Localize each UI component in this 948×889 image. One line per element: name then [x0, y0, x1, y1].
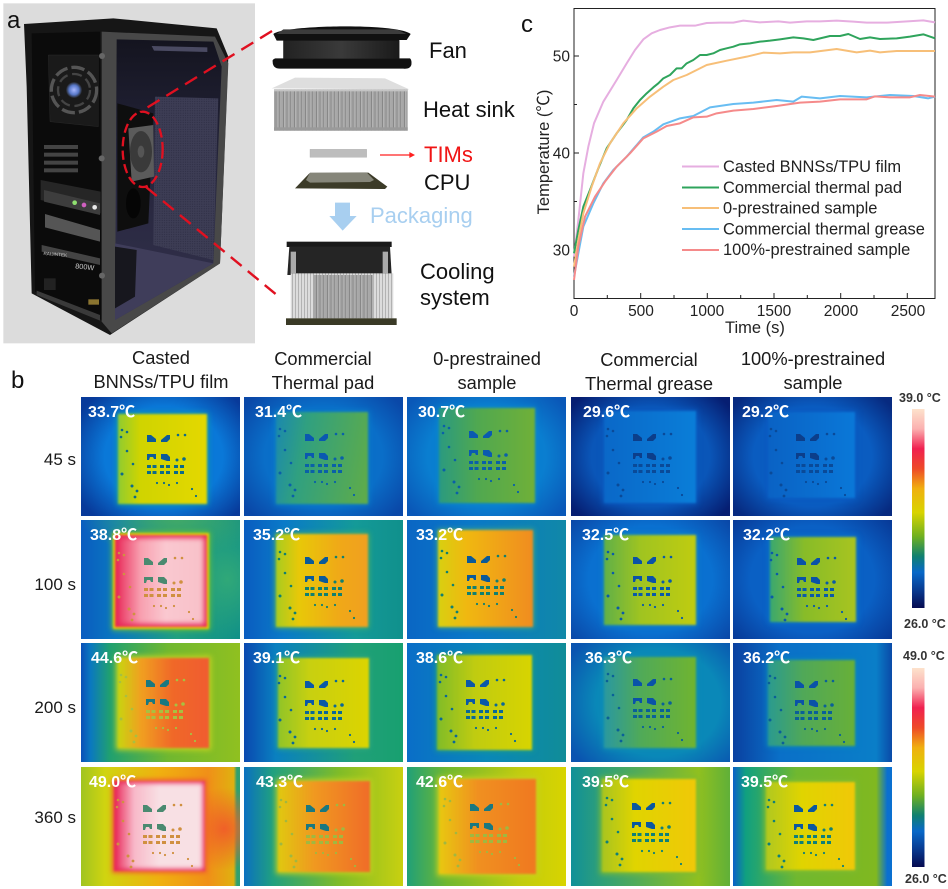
- thermal image: thermal pad 100 s: 35.2℃: [253, 527, 300, 544]
- heading: thermal pad: Thermal pad: [272, 372, 374, 393]
- axis tick labels: 50: [553, 48, 570, 66]
- label: Cooling system: Cooling: [420, 259, 495, 284]
- heading: thermal grease: Thermal grease: [585, 373, 713, 394]
- thermal image: casted film 45 s: [81, 397, 240, 516]
- grey background: [3, 3, 255, 343]
- heading: 100%-prestrained: 100%-prestrained: [741, 348, 885, 369]
- thermal image: casted film 360 s: 49.0℃: [89, 774, 136, 791]
- legend: Commercial thermal pad: [723, 179, 902, 197]
- label: TIMs: TIMs: [424, 142, 473, 167]
- colour scale 26–49 °C: 26.0 °C: [905, 872, 947, 886]
- dashed callout ring: [123, 112, 163, 187]
- panel label a: a: [7, 7, 20, 34]
- axis tick labels: 30: [553, 242, 570, 260]
- x axis title: Time (s): [725, 319, 785, 337]
- thermal image: thermal grease 360 s: 39.5℃: [582, 774, 629, 791]
- row label: 100 s: 100 s: [34, 575, 76, 594]
- colour scale 26–49 °C: 49.0 °C: [903, 649, 945, 663]
- heading: 0-prestrained: 0-prestrained: [433, 348, 541, 369]
- thermal image: 100%-prestrained 100 s: 32.2℃: [743, 527, 790, 544]
- panel label b: b: [11, 367, 24, 394]
- thermal image: thermal pad 360 s: [244, 767, 403, 886]
- heading: 100%-prestrained: sample: [784, 372, 842, 393]
- thermal image: casted film 45 s: 33.7℃: [88, 404, 135, 421]
- data curves: [574, 20, 935, 280]
- colour scale 26–49 °C: [903, 649, 947, 886]
- thermal image: casted film 200 s: [81, 643, 240, 762]
- heading: casted film: BNNSs/TPU film: [93, 371, 229, 392]
- thermal image: casted film 100 s: [81, 520, 240, 639]
- axis tick labels: 1500: [757, 303, 792, 320]
- thermal image: 0-prestrained 200 s: 38.6℃: [416, 650, 463, 667]
- label: Fan: Fan: [429, 38, 467, 63]
- thermal image: thermal pad 100 s: [244, 520, 403, 639]
- thermal image: thermal grease 45 s: 29.6℃: [583, 404, 630, 421]
- icon: CPU: [295, 172, 387, 189]
- axis tick labels: 2000: [824, 303, 859, 320]
- thermal image: casted film 200 s: 44.6℃: [91, 650, 138, 667]
- row label: 45 s: 45 s: [44, 450, 76, 469]
- cooling system exploded view: [272, 26, 415, 325]
- thermal image: thermal grease 200 s: [571, 643, 730, 762]
- dashed red zoom lines: [139, 30, 276, 295]
- component labels: [370, 38, 516, 310]
- thermal image: 100%-prestrained 200 s: [733, 643, 892, 762]
- arrow: packaging: [329, 203, 357, 231]
- legend: [682, 158, 925, 259]
- heading: thermal pad: Commercial: [274, 348, 372, 369]
- thermal image: 100%-prestrained 100 s: [733, 520, 892, 639]
- thermal image: casted film 100 s: 38.8℃: [90, 527, 137, 544]
- thermal image: 0-prestrained 45 s: 30.7℃: [418, 404, 465, 421]
- thermal image: 0-prestrained 360 s: [407, 767, 566, 886]
- icon: assembled cooling system: [286, 242, 397, 325]
- thermal image: 100%-prestrained 45 s: [733, 397, 892, 516]
- thermal image: 100%-prestrained 360 s: [733, 767, 892, 886]
- heading: thermal grease: Commercial: [600, 349, 698, 370]
- panel c: temperature vs time chart: [521, 8, 936, 337]
- y axis title: Temperature (℃): [535, 90, 553, 214]
- legend: Commercial thermal grease: [723, 220, 925, 238]
- label: Heat sink: Heat sink: [423, 97, 516, 122]
- thermal image: 0-prestrained 45 s: [407, 397, 566, 516]
- axis tick labels: 2500: [891, 303, 926, 320]
- legend: 100%-prestrained sample: [723, 241, 910, 259]
- axis tick labels: 0: [570, 303, 579, 320]
- arrow to TIMs: [380, 152, 415, 158]
- icon: fan: [273, 26, 412, 69]
- computer case: 800W: [75, 261, 95, 272]
- label: Cooling system: system: [420, 285, 490, 310]
- thermal image: 0-prestrained 360 s: 42.6℃: [416, 774, 463, 791]
- computer case: RAIJINTEK: [43, 251, 68, 258]
- axis tick labels: 1000: [690, 303, 725, 320]
- thermal image: thermal grease 200 s: 36.3℃: [585, 650, 632, 667]
- TIM layer: [310, 149, 367, 157]
- thermal image: thermal pad 45 s: 31.4℃: [255, 404, 302, 421]
- plot frame and ticks: [574, 8, 935, 298]
- colour scale 26–39 °C: 39.0 °C: [899, 391, 941, 405]
- axis tick labels: [553, 48, 926, 320]
- thermal image: thermal pad 200 s: [244, 643, 403, 762]
- row label: 360 s: 360 s: [34, 808, 76, 827]
- thermal image: 100%-prestrained 200 s: 36.2℃: [743, 650, 790, 667]
- thermal image: thermal pad 200 s: 39.1℃: [253, 650, 300, 667]
- heading: casted film: Casted: [132, 347, 190, 368]
- thermal image: thermal grease 100 s: [571, 520, 730, 639]
- panel a: PC case illustration: [3, 3, 255, 344]
- colour scale 26–39 °C: 26.0 °C: [904, 617, 946, 631]
- thermal image: 100%-prestrained 360 s: 39.5℃: [741, 774, 788, 791]
- thermal image: thermal pad 360 s: 43.3℃: [256, 774, 303, 791]
- thermal image: thermal pad 45 s: [244, 397, 403, 516]
- thermal image: 0-prestrained 200 s: [407, 643, 566, 762]
- axis tick labels: 500: [628, 303, 654, 320]
- thermal image: thermal grease 45 s: [571, 397, 730, 516]
- legend: Casted BNNSs/TPU film: [723, 158, 901, 176]
- thermal image: 0-prestrained 100 s: [407, 520, 566, 639]
- legend: 0-prestrained sample: [723, 200, 877, 218]
- label: Packaging: Packaging: [370, 203, 473, 228]
- thermal image: casted film 360 s: [81, 767, 240, 886]
- computer case: [24, 18, 228, 335]
- axis tick labels: 40: [553, 146, 570, 162]
- heading: 0-prestrained: sample: [458, 372, 516, 393]
- thermal image: 100%-prestrained 45 s: 29.2℃: [742, 404, 789, 421]
- thermal image: 0-prestrained 100 s: 33.2℃: [416, 527, 463, 544]
- row label: 200 s: 200 s: [34, 698, 76, 717]
- icon: heat sink: [272, 78, 409, 131]
- panel label c: c: [521, 11, 533, 38]
- label: CPU: CPU: [424, 170, 470, 195]
- thermal image: thermal grease 100 s: 32.5℃: [582, 527, 629, 544]
- thermal image: thermal grease 360 s: [571, 767, 730, 886]
